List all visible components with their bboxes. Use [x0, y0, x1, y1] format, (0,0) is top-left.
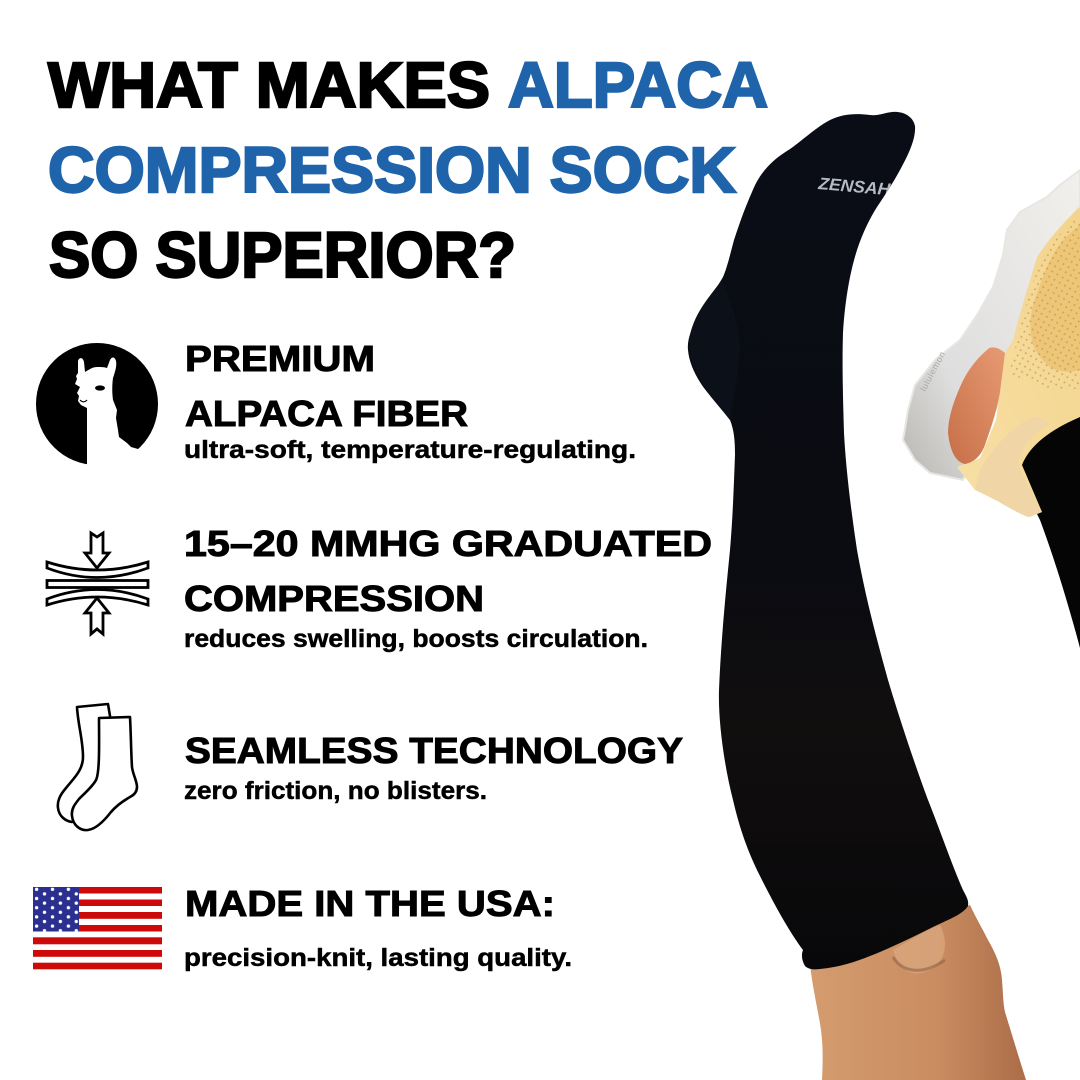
text block: made in the usa: MADE IN THE USA:	[185, 883, 555, 924]
title: WHAT MAKES	[48, 49, 490, 121]
title: COMPRESSION SOCK	[48, 134, 736, 206]
sole brand text: lululemon	[918, 349, 947, 393]
photo: bare knee below sock	[810, 905, 1026, 1080]
icon: USA flag	[33, 887, 162, 969]
text block: graduated compression: reduces swelling, boosts circulation.	[184, 625, 648, 653]
text block: made in the usa	[184, 883, 572, 972]
icon: pair of socks	[58, 704, 137, 830]
text block: seamless technology	[184, 730, 683, 805]
text block: graduated compression: COMPRESSION	[184, 578, 484, 619]
icon: alpaca in black circle	[36, 343, 158, 470]
text block: graduated compression	[184, 523, 712, 653]
text block: made in the usa: precision-knit, lasting quality.	[184, 944, 572, 972]
text block: seamless technology: SEAMLESS TECHNOLOGY	[185, 730, 683, 771]
text block: premium alpaca fiber: PREMIUM	[185, 338, 375, 379]
title	[48, 49, 768, 291]
text block: premium alpaca fiber: ultra-soft, temperature-regulating.	[184, 436, 636, 464]
text block: seamless technology: zero friction, no blisters.	[184, 777, 487, 805]
text block: premium alpaca fiber: ALPACA FIBER	[185, 393, 468, 434]
photo: black knee-high sock	[688, 112, 968, 969]
title: SO SUPERIOR?	[49, 219, 516, 291]
text block: graduated compression: 15–20 MMHG GRADUATED	[184, 523, 712, 564]
logo on sock: ZENSAH	[817, 174, 892, 199]
title: ALPACA	[508, 49, 768, 121]
icon: compression arrows and layers	[47, 533, 148, 634]
text block: premium alpaca fiber	[184, 338, 636, 464]
photo: sneaker and second leg	[903, 170, 1080, 648]
